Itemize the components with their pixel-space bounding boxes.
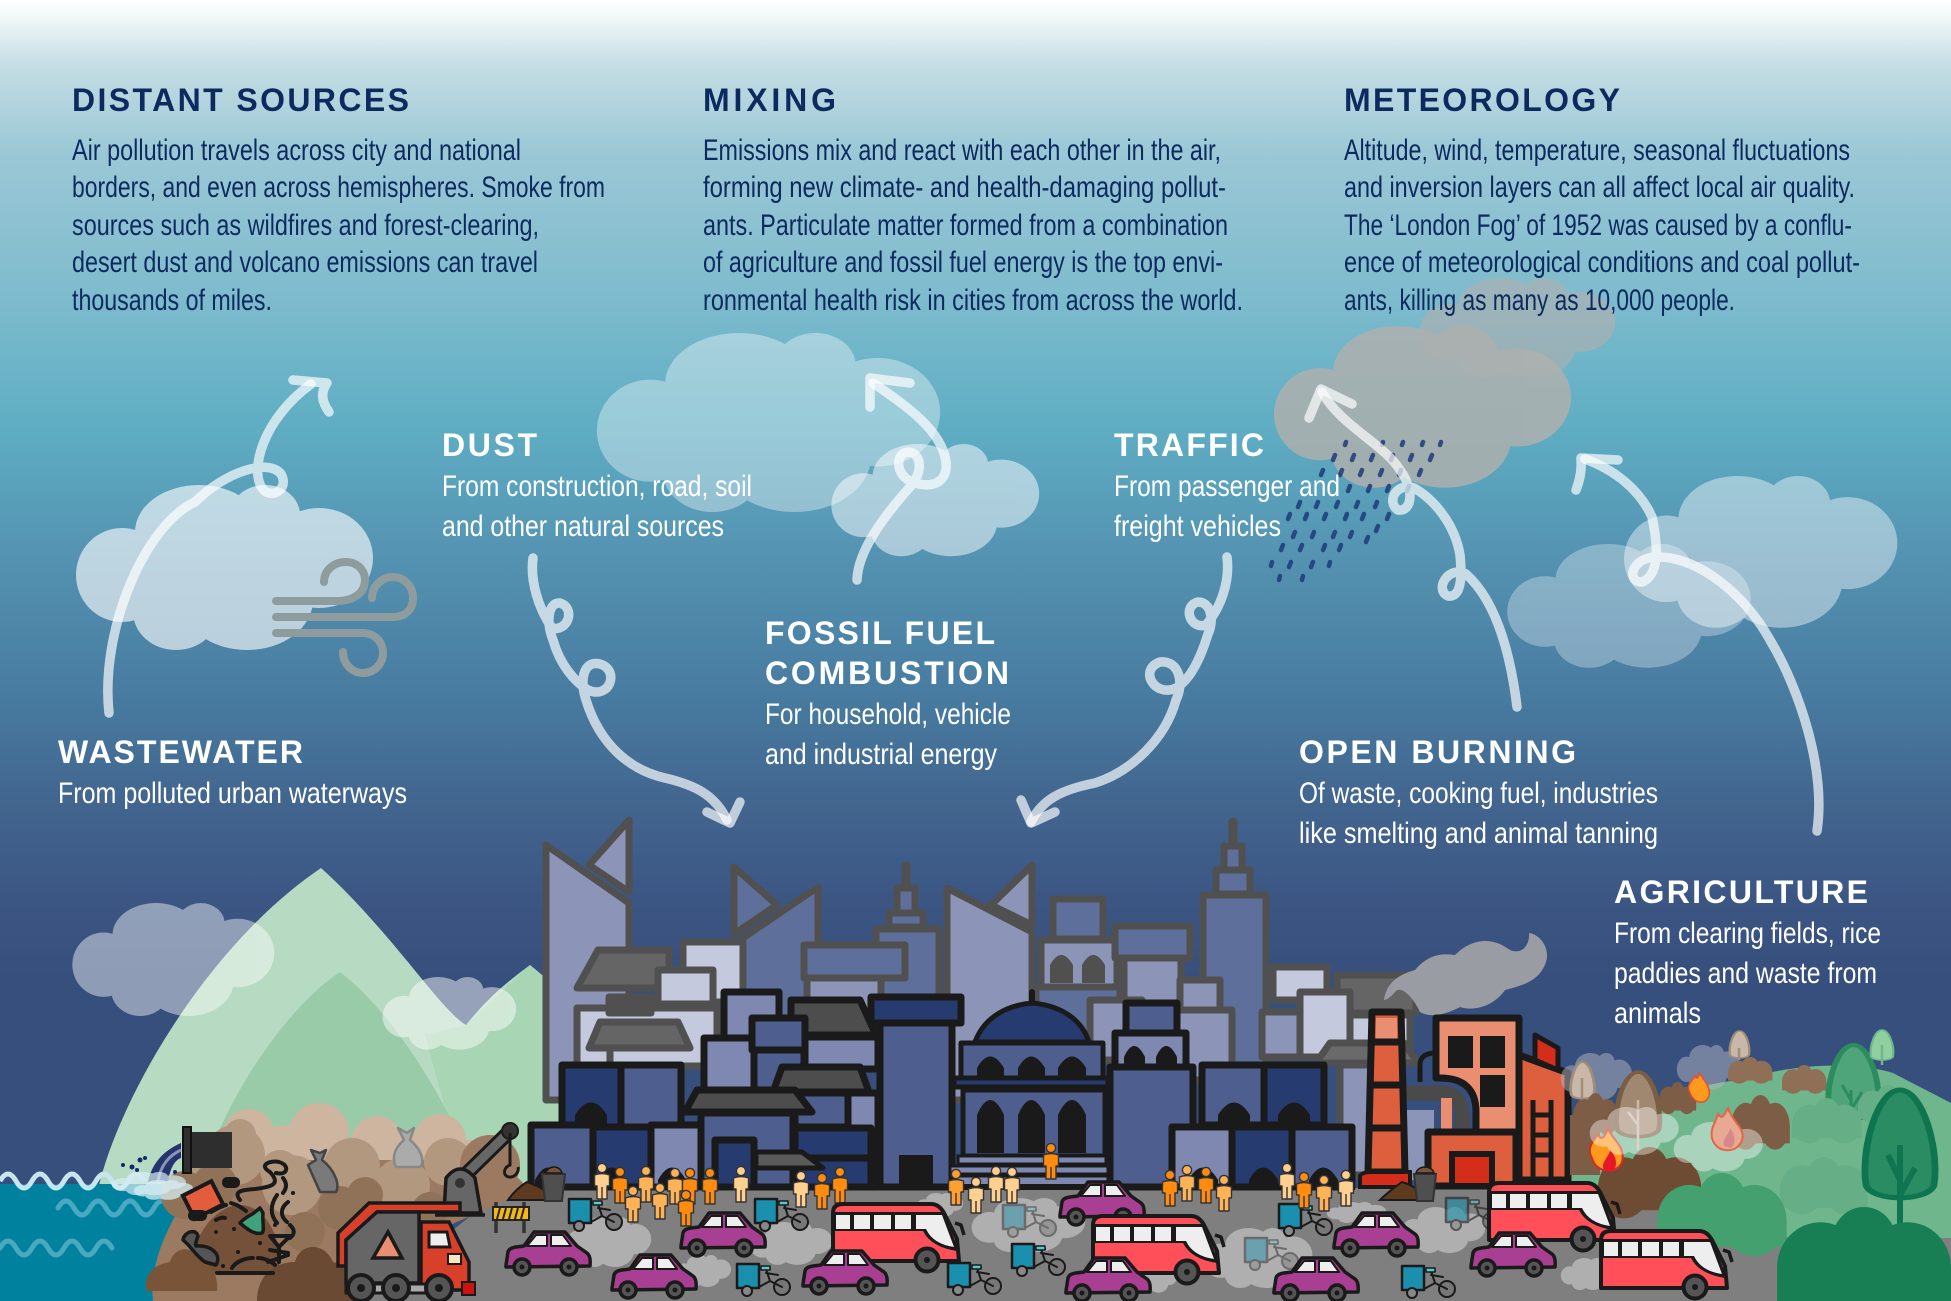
label: open burning — [1299, 734, 1658, 850]
arrow: fossil fuel — [857, 378, 946, 580]
label: agriculture: AGRICULTURE — [1614, 874, 1868, 910]
label: agriculture — [1614, 874, 1881, 1030]
block: right tower — [1110, 1003, 1193, 1187]
icon: wind — [276, 562, 413, 673]
icon: flame top — [1689, 1072, 1709, 1102]
cloud: over mountain left — [72, 903, 274, 1016]
label: agriculture: paddies and waste from — [1614, 957, 1877, 990]
heading block: mixing: MIXING — [703, 82, 836, 118]
dump: dirt mounds — [146, 1103, 530, 1301]
right hills: mounds, trees and fires — [1561, 1030, 1951, 1301]
factory: main block — [1436, 1018, 1519, 1133]
mound: brown group — [1573, 1082, 1790, 1150]
building: mid right boxes — [1036, 899, 1190, 1060]
label: wastewater: From polluted urban waterways — [58, 777, 407, 810]
truck body — [338, 1203, 460, 1266]
arrow: open burning — [1309, 389, 1517, 707]
cars — [506, 1213, 1555, 1301]
people — [594, 1143, 1354, 1226]
heading block: mixing: forming new climate- and health-damaging pollut- — [703, 171, 1226, 204]
building: left crown — [546, 820, 629, 1100]
label: dust: DUST — [442, 427, 537, 463]
smoke clouds behind trees — [1561, 1053, 1632, 1100]
item: grey rat — [183, 1232, 218, 1265]
block: central tower — [871, 997, 961, 1187]
icon: flame right — [1712, 1108, 1743, 1150]
right hills — [1560, 1066, 1951, 1301]
block: left low panels — [531, 1125, 711, 1187]
building: tall right tower — [1172, 822, 1266, 1080]
tree: pale brown top — [1730, 1031, 1749, 1060]
label: fossil fuel combustion: For household, vehicle — [765, 698, 1011, 731]
heading block: meteorology — [1344, 82, 1860, 317]
buses — [833, 1183, 1732, 1298]
building: second crown — [734, 867, 818, 1040]
mound: dark brown — [1570, 1115, 1701, 1218]
tree: small light — [1871, 1030, 1893, 1065]
label: traffic: freight vehicles — [1114, 510, 1281, 543]
car behind bus — [1060, 1182, 1144, 1225]
tree: big green — [1865, 1090, 1935, 1225]
arrow: traffic — [1021, 557, 1228, 823]
smoke over fires — [1590, 1107, 1679, 1155]
block: right low panels — [1172, 1127, 1352, 1187]
label: wastewater: WASTEWATER — [58, 734, 303, 770]
heading block: mixing: ants. Particulate matter formed from a combination — [703, 209, 1228, 242]
tree: pale brown left — [1571, 1062, 1594, 1102]
crane — [460, 1131, 510, 1180]
dirt pile — [192, 1205, 279, 1273]
heading block: meteorology: ants, killing as many as 10,000 people. — [1344, 284, 1735, 317]
heading block: distant sources: borders, and even across hemispheres. Smoke from — [72, 171, 605, 204]
block: domed palace — [950, 992, 1118, 1187]
arrow: wastewater — [108, 380, 329, 713]
block: left twin panels — [562, 1065, 681, 1127]
heading block: mixing — [703, 82, 1243, 317]
label: traffic — [1114, 427, 1340, 543]
heading block: meteorology: METEOROLOGY — [1344, 82, 1620, 118]
label: dust: From construction, road, soil — [442, 470, 752, 503]
buildings: left pale block — [577, 942, 743, 1066]
tricycles — [569, 1198, 1499, 1298]
mound: dark green — [1777, 1207, 1951, 1301]
traffic smoke — [566, 1193, 1617, 1293]
label: open burning: like smelting and animal tanning — [1299, 817, 1658, 850]
crane and garbage truck — [338, 1123, 518, 1301]
label: open burning: Of waste, cooking fuel, industries — [1299, 777, 1658, 810]
sea and waves — [0, 1174, 220, 1301]
label: dust — [442, 427, 752, 543]
heading block: distant sources: desert dust and volcano emissions can travel — [72, 246, 538, 279]
item: green bottle — [240, 1208, 263, 1233]
label: wastewater — [58, 734, 407, 810]
item: scribbles — [211, 1162, 294, 1273]
factory: ladder — [1533, 1100, 1551, 1178]
block: stacked mid buildings — [685, 992, 878, 1187]
label: traffic: From passenger and — [1114, 470, 1340, 503]
rubbish bags — [308, 1128, 422, 1192]
building: central spire — [804, 866, 939, 1029]
back layer: grey city skyline — [546, 820, 1418, 1175]
heading block: mixing: ronmental health risk in cities from across the world. — [703, 284, 1243, 317]
icon: rain streaks — [1271, 442, 1441, 580]
factory: background fill — [1404, 1110, 1434, 1180]
label: fossil fuel combustion: COMBUSTION — [765, 655, 1009, 691]
heading block: distant sources: thousands of miles. — [72, 284, 272, 317]
heading block: distant sources: Air pollution travels across city and national — [72, 134, 521, 167]
trash pile — [183, 1162, 295, 1273]
buildings: right pale block — [1262, 967, 1418, 1175]
factory: pipe — [1404, 1093, 1462, 1135]
tree: brown big — [1616, 1072, 1660, 1150]
road — [365, 1188, 1951, 1301]
factory: lower hall — [1428, 1132, 1516, 1186]
factory — [1360, 1012, 1568, 1187]
factory: side wing — [1519, 1055, 1568, 1180]
building: third crown — [947, 865, 1032, 1100]
cloud: grey rain cloud — [1274, 326, 1571, 488]
label: agriculture: animals — [1614, 997, 1701, 1030]
pipe and spout — [112, 1127, 232, 1200]
tree: green middle — [1828, 1045, 1879, 1122]
arrow: dust — [532, 558, 740, 823]
block: right twin panels — [1202, 1065, 1324, 1125]
label: agriculture: From clearing fields, rice — [1614, 917, 1881, 950]
mound: mid green — [1657, 1173, 1787, 1256]
heading block: distant sources — [72, 82, 605, 317]
label: fossil fuel combustion: and industrial energy — [765, 738, 997, 771]
icon: flame left — [1590, 1128, 1623, 1172]
factory smoke — [1384, 933, 1547, 1015]
street bins and dirt — [508, 1167, 1436, 1201]
barrier — [493, 1202, 529, 1233]
factory: chimney — [1368, 1012, 1405, 1172]
arrow: agriculture — [1576, 458, 1819, 831]
label: dust: and other natural sources — [442, 510, 724, 543]
mound: light green — [1780, 1085, 1918, 1214]
heading block: mixing: of agriculture and fossil fuel energy is the top envi- — [703, 246, 1223, 279]
item: red box — [183, 1181, 223, 1219]
label: open burning: OPEN BURNING — [1299, 734, 1576, 770]
cloud: right upper — [1624, 476, 1897, 628]
label: fossil fuel combustion: FOSSIL FUEL — [765, 615, 995, 651]
mountains — [98, 868, 560, 1200]
cloud: right lower — [1507, 544, 1751, 668]
cloud: grey behind — [1419, 278, 1615, 377]
heading block: distant sources: sources such as wildfires and forest-clearing, — [72, 209, 539, 242]
heading block: distant sources: DISTANT SOURCES — [72, 82, 409, 118]
front layer: dark city blocks — [525, 992, 1355, 1190]
label: traffic: TRAFFIC — [1114, 427, 1264, 463]
arches along street — [535, 1168, 1338, 1187]
cloud: centre small — [831, 444, 1039, 556]
cloud: centre large — [597, 333, 940, 512]
cloud: left with wind — [76, 485, 373, 650]
label: fossil fuel combustion — [765, 615, 1011, 771]
cloud: over mountain right — [383, 977, 516, 1050]
heading block: mixing: Emissions mix and react with each other in the air, — [703, 134, 1221, 167]
smoke over right fire — [1674, 1122, 1763, 1172]
